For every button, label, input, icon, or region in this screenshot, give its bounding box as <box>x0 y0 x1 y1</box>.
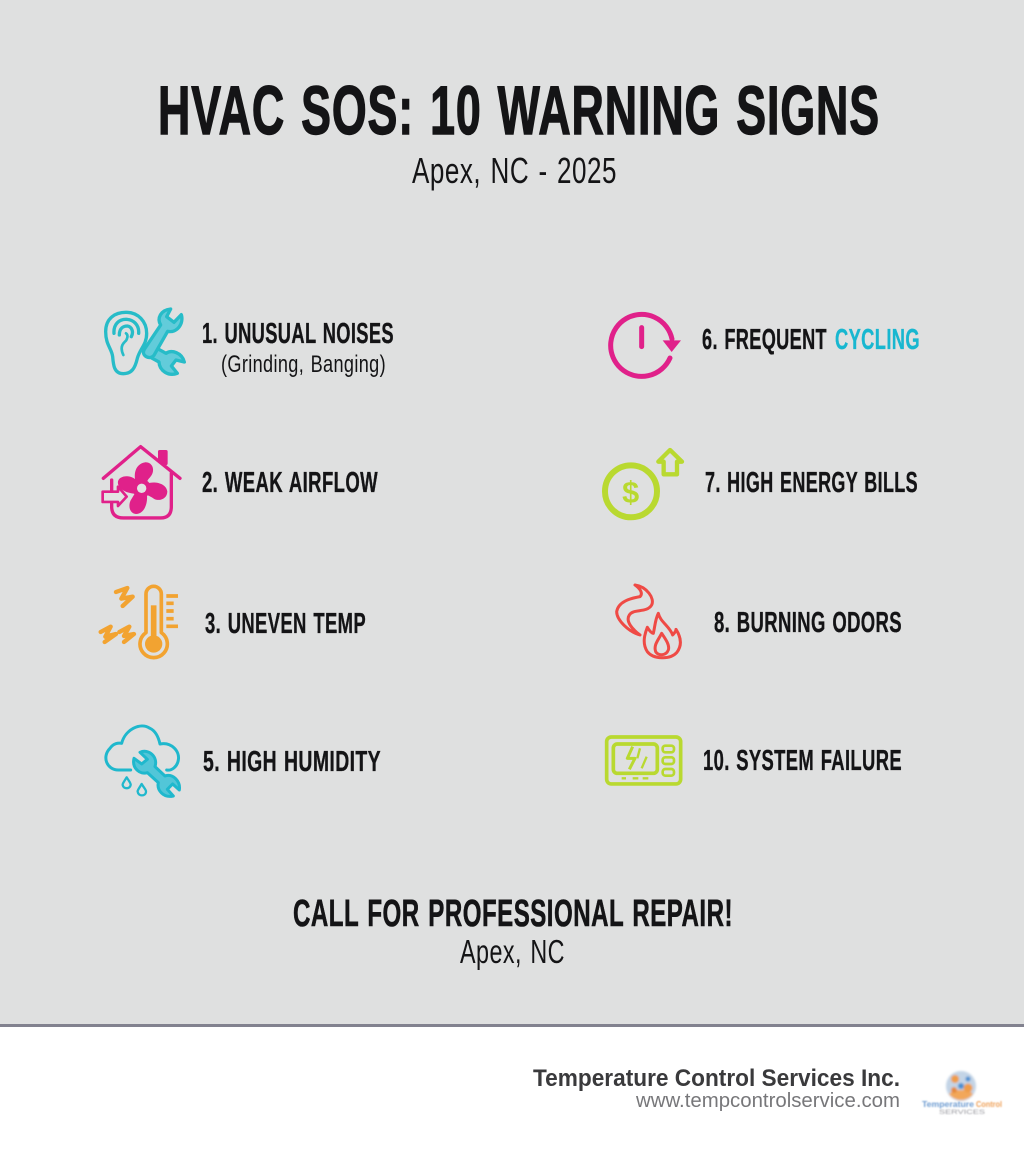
icon: smoke swirl and flame <box>617 585 680 658</box>
label 1 detail: (Grinding, Banging) <box>221 351 386 378</box>
item 5: high humidity <box>106 726 381 796</box>
label 6: 6. FREQUENT <box>702 324 827 356</box>
label 1: 1. UNUSUAL NOISES <box>202 318 394 350</box>
item 10: system failure <box>607 737 902 784</box>
icon: clock with cycle arrow <box>611 314 681 376</box>
logo: SERVICES <box>939 1110 985 1116</box>
label 3: 3. UNEVEN TEMP <box>205 608 366 640</box>
subtitle: Apex, NC - 2025 <box>412 150 617 191</box>
icon: dollar coin with up arrow <box>605 450 682 517</box>
icon: thermometer <box>101 586 178 658</box>
item 8: burning odors <box>617 585 902 658</box>
item 6: frequent cycling <box>611 314 920 376</box>
icon: cloud with wrench <box>106 726 179 796</box>
logo: Control <box>976 1100 1002 1109</box>
icon: dollar coin with up arrow: $ <box>622 475 639 509</box>
label 8: 8. BURNING ODORS <box>714 607 902 639</box>
footer <box>0 1024 1024 1154</box>
label 10: 10. SYSTEM FAILURE <box>703 745 902 777</box>
item 3: uneven temp <box>101 586 366 658</box>
label 2: 2. WEAK AIRFLOW <box>202 467 378 499</box>
logo: Temperature <box>922 1100 975 1109</box>
website: www.tempcontrolservice.com <box>635 1090 900 1112</box>
label 6 highlight: CYCLING <box>835 324 920 356</box>
icon: broken control panel <box>607 737 681 784</box>
call to action: CALL FOR PROFESSIONAL REPAIR! <box>293 893 733 935</box>
company name: Temperature Control Services Inc. <box>533 1065 900 1092</box>
logo <box>922 1071 1002 1116</box>
icon: house with fan <box>103 447 180 518</box>
item 7: high energy bills <box>605 450 918 517</box>
call to action location: Apex, NC <box>460 933 565 970</box>
item 2: weak airflow <box>103 447 378 518</box>
icon: ear and wrench <box>106 309 184 374</box>
item 1: unusual noises <box>106 309 394 378</box>
label 5: 5. HIGH HUMIDITY <box>203 746 381 778</box>
